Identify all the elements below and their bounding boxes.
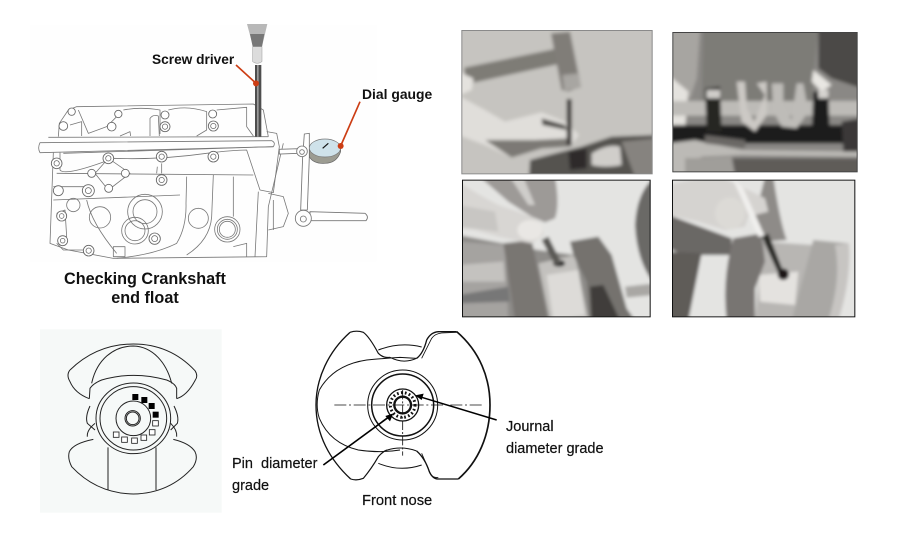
label: journal diameter grade: diameter grade xyxy=(506,441,604,457)
red pointers xyxy=(236,65,360,149)
grade squares: filled xyxy=(132,394,159,418)
arrow: pin diameter grade xyxy=(323,413,393,465)
label: front nose: Front nose xyxy=(362,493,432,509)
label: pin diameter grade: Pin diameter xyxy=(232,456,318,472)
engine block line drawing xyxy=(39,104,288,258)
screw driver xyxy=(247,24,267,137)
dial gauge xyxy=(309,139,341,163)
arrow: journal diameter grade xyxy=(415,394,497,420)
diagram: engine block with screw driver and dial gauge xyxy=(30,24,377,262)
label: pin diameter grade: grade xyxy=(232,478,269,494)
diagram: crankshaft grade marks, rear view xyxy=(40,329,222,513)
bolts xyxy=(51,108,219,256)
photo: hammer and punch xyxy=(458,27,656,177)
dial gauge stand xyxy=(279,133,367,226)
label: screw driver: Screw driver xyxy=(152,52,235,67)
label: journal diameter grade: Journal xyxy=(506,419,554,435)
grade squares: hollow xyxy=(113,421,158,443)
caption: checking crankshaft end float: end float xyxy=(111,289,179,307)
diagram: crankshaft front nose with grade arrows xyxy=(316,331,497,480)
photo: fingers at oil hole xyxy=(458,177,655,320)
photo: cleaning oil hole with brush xyxy=(668,177,858,320)
photo: crankshaft held in block xyxy=(668,28,862,175)
label: dial gauge: Dial gauge xyxy=(362,86,433,102)
caption: checking crankshaft end float: Checking Crankshaft xyxy=(64,270,227,288)
